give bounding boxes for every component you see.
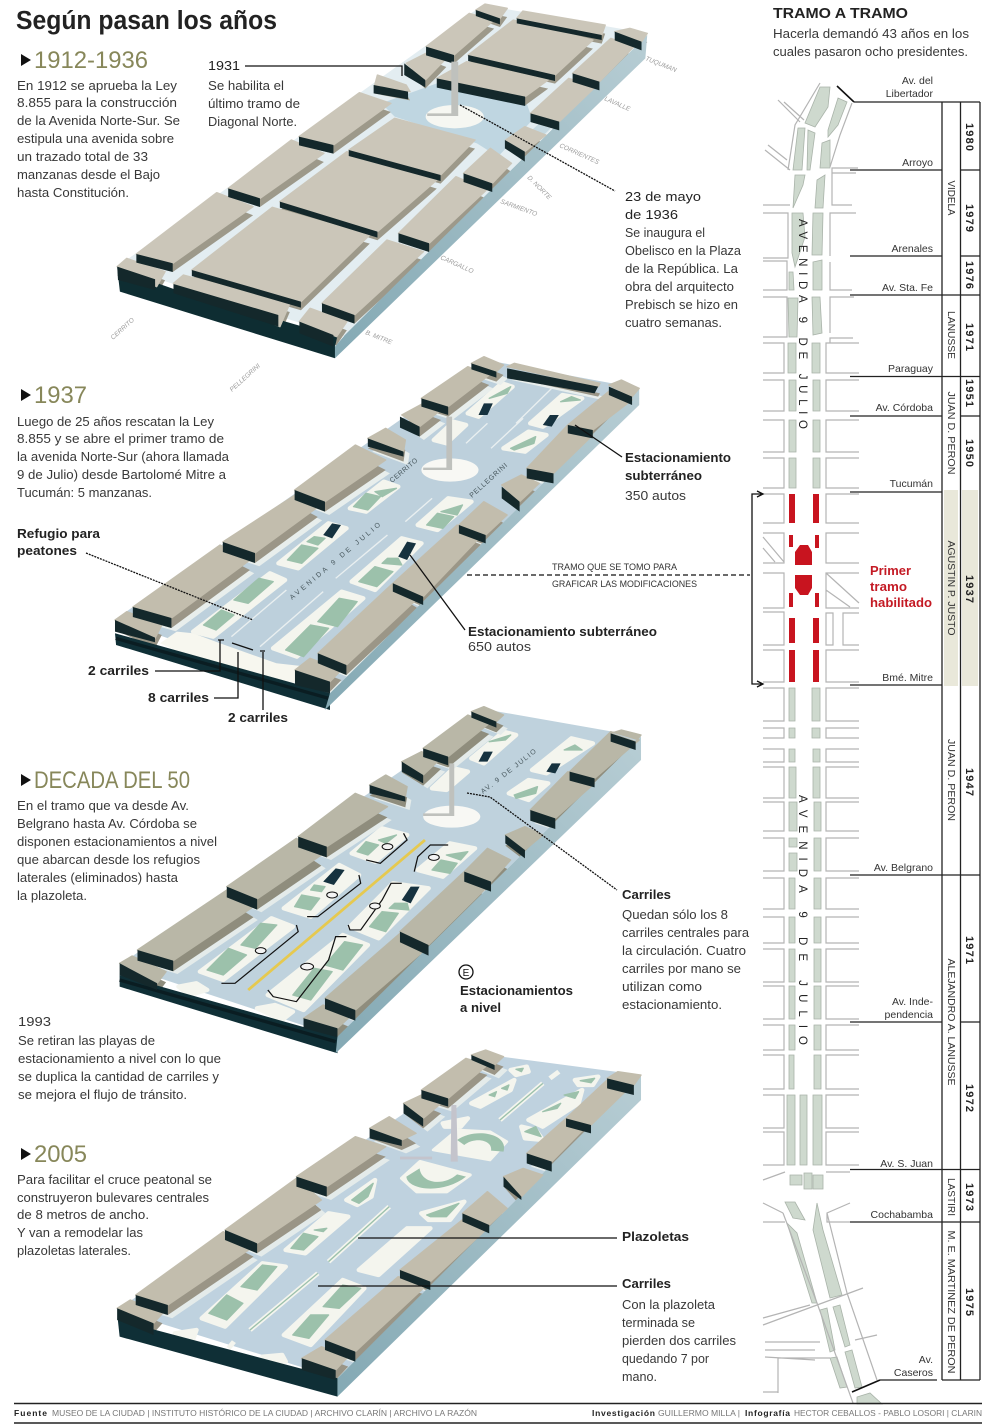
lane dividers [231, 388, 552, 647]
callout: 1931: Diagonal Norte. [208, 114, 297, 129]
callout: plazoletas: Plazoletas [622, 1229, 689, 1244]
heading: tramo a tramo: cuales pasaron ocho presidentes. [773, 44, 968, 59]
years: 1976 [963, 261, 975, 289]
text: 1993: se mejora el flujo de tránsito. [18, 1087, 187, 1102]
street names: Av. Inde- [892, 996, 933, 1008]
text: 1912-1936: hasta Constitución. [17, 185, 129, 200]
legend: estacionamientos a nivel: Estacionamientos [460, 983, 573, 998]
highlighted 1937 cells [944, 490, 978, 686]
street labels on second model [289, 457, 509, 602]
parking markers [255, 844, 439, 970]
street names: Av. Córdoba [876, 402, 933, 414]
presidents: LANUSSE [945, 311, 956, 359]
presidents: VIDELA [945, 180, 956, 216]
street surface [114, 360, 639, 693]
connector: section used for the models: GRAFICAR LAS MODIFICACIONES [552, 579, 697, 590]
right side blue strip [517, 33, 647, 150]
callout: carriles 2005: quedando 7 por [622, 1351, 710, 1366]
callout: 23 de mayo de 1936: 23 de mayo [625, 189, 701, 204]
street surface [120, 710, 641, 1037]
panel: 1937 block model [114, 357, 644, 710]
callout: carriles labels: 2 carriles [228, 710, 288, 725]
callout: refugio para peatones: peatones [17, 543, 77, 558]
street labels on first model: PELLEGRINI [229, 363, 262, 393]
base layer line [116, 638, 329, 698]
callout: 1931: último tramo de [208, 96, 300, 111]
text: 2005: Y van a remodelar las [17, 1225, 143, 1240]
street names: Caseros [894, 1367, 933, 1379]
callout: carriles 2005: terminada se [622, 1315, 695, 1330]
monument circle [426, 105, 484, 128]
bracket marking the modelled section [752, 491, 763, 687]
text: 1912-1936: 8.855 para la construcción [17, 95, 177, 110]
street labels on first model: LAVALLE [603, 95, 632, 113]
heading: tramo a tramo: Hacerla demandó 43 años en los [773, 26, 970, 41]
monument circle [423, 806, 480, 828]
callout: carriles 1950s [467, 793, 750, 1012]
street names: Arenales [892, 243, 933, 255]
parking islands [200, 732, 593, 1010]
street names: Av. S. Juan [880, 1158, 933, 1170]
street names: Av. Sta. Fe [882, 282, 933, 294]
connector: section used for the models: TRAMO QUE SE TOMO PARA [552, 562, 678, 573]
footer credits [14, 1404, 982, 1423]
street labels on first model: TUQUMAN [644, 55, 678, 74]
text: 2005: de 8 metros de ancho. [17, 1207, 149, 1222]
presidents: ALEJANDRO A. LANUSSE [945, 958, 956, 1086]
callout: estacionamiento 650 autos [410, 555, 657, 654]
section 2005 heading: 2005 [34, 1141, 87, 1168]
presidents: JUAN D. PERON [945, 739, 956, 821]
street names: Libertador [886, 88, 934, 100]
text: decade of the 50s [17, 798, 217, 903]
label: primer tramo habilitado: Primer [870, 563, 911, 578]
map of avenida 9 de julio [752, 83, 882, 1404]
obelisk [423, 417, 452, 470]
panel: 1912-1936 block model [117, 4, 647, 358]
lower plazoleta [402, 1162, 470, 1192]
text: 1912-1936: En 1912 se aprueba la Ley [17, 78, 178, 93]
text: 1937 [17, 414, 230, 500]
garden patches [204, 387, 580, 657]
street surface [117, 5, 647, 337]
callout: refugio para peatones [17, 526, 253, 620]
callout: 23 de mayo de 1936: cuatro semanas. [625, 315, 722, 330]
text: decade of the 50s: Belgrano hasta Av. Córdoba se [17, 816, 197, 831]
callout: 23 de mayo de 1936: Obelisco en la Plaza [625, 243, 742, 258]
callout: 23 de mayo de 1936: de la República. La [625, 261, 739, 276]
panel: 2005 block model [117, 1050, 645, 1397]
street names: Paraguay [888, 363, 934, 375]
text: 1912-1936: estipula una avenida sobre [17, 131, 174, 146]
callout: carriles 2005: pierden dos carriles [622, 1333, 736, 1348]
years: 1975 [963, 1288, 975, 1316]
callout: estacionamiento 350 autos [575, 425, 731, 503]
text: 1993: se duplica la cantidad de carriles y [18, 1069, 219, 1084]
lower section gardens [785, 1173, 882, 1404]
base right side [325, 388, 639, 710]
text: 1912-1936: un trazado total de 33 [17, 149, 148, 164]
presidents: JUAN D. PERON [945, 392, 956, 474]
callout: estacionamiento 350 autos: 350 autos [625, 488, 687, 503]
upper plazoleta [433, 1130, 507, 1160]
building end faces [117, 10, 642, 347]
building sidewalks [162, 376, 602, 693]
table lines [850, 102, 980, 1380]
heading: tramo a tramo: TRAMO A TRAMO [773, 5, 908, 22]
building side faces [117, 1060, 641, 1380]
footer credits: Investigación [592, 1408, 655, 1418]
street labels on first model: SARMIENTO [499, 198, 538, 218]
text: decade of the 50s: laterales (eliminados) hasta [17, 870, 179, 885]
panel: decade of the 50s block model [120, 707, 645, 1053]
text: 1937: Luego de 25 años rescatan la Ley [17, 414, 214, 429]
white front plaza area [160, 632, 307, 683]
straight section gardens [787, 343, 822, 1165]
legend: estacionamientos a nivel: a nivel [460, 1000, 501, 1015]
text: 1993: Se retiran las playas de [18, 1033, 155, 1048]
years: 1971 [963, 936, 975, 964]
avenue name, lower: AVENIDA 9 DE JULIO [796, 795, 808, 1045]
footer credits: MUSEO DE LA CIUDAD | INSTITUTO HISTÓRICO DE LA CIUDAD | ARCHIVO CLARÍN | ARCHIVO LA RAZÓN [52, 1409, 477, 1418]
street labels on first model: B. MITRE [364, 329, 394, 347]
callout: carriles 1950s: la circulación. Cuatro [622, 943, 746, 958]
garden patches [207, 735, 582, 1000]
footer credits: HECTOR CEBALLOS - PABLO LOSORI | CLARIN [794, 1409, 982, 1418]
callout: estacionamiento 350 autos: Estacionamiento [625, 450, 731, 465]
text: 1937: la avenida Norte-Sur (ahora llamada [17, 449, 230, 464]
callout: carriles 1950s: Carriles [622, 887, 671, 902]
label: primer tramo habilitado [870, 563, 932, 610]
obelisk [423, 763, 454, 816]
building roofs [117, 4, 647, 337]
callout: estacionamiento 650 autos: Estacionamiento subterráneo [468, 624, 657, 639]
text: 2005 [17, 1172, 212, 1258]
obelisk [400, 1105, 458, 1162]
street labels on first model [110, 55, 678, 393]
callout: 23 de mayo de 1936 [460, 105, 742, 330]
callout: 23 de mayo de 1936: Prebisch se hizo en [625, 297, 738, 312]
text: decade of the 50s: la plazoleta. [17, 888, 87, 903]
callout: carriles 1950s: utilizan como [622, 979, 702, 994]
callout: carriles labels [88, 640, 288, 725]
building side faces [120, 717, 641, 1039]
street cut marks [837, 86, 880, 1392]
label: primer tramo habilitado: habilitado [870, 595, 932, 610]
callout: 23 de mayo de 1936: obra del arquitecto [625, 279, 734, 294]
street names: Arroyo [902, 157, 933, 169]
callout: carriles 2005: Con la plazoleta [622, 1297, 716, 1312]
street labels on first model: CORRIENTES [558, 142, 601, 166]
years: 1950 [963, 439, 975, 467]
years [963, 123, 975, 1316]
building sidewalks [162, 1068, 546, 1378]
callout: carriles 1950s: carriles centrales para [622, 925, 750, 940]
parking brackets [221, 833, 448, 1002]
years: 1937 [963, 575, 975, 603]
years: 1973 [963, 1183, 975, 1211]
callout: carriles 2005: mano. [622, 1369, 657, 1384]
upper road outlines [763, 83, 858, 343]
text: 1993 [18, 1014, 221, 1102]
upper plazoleta garden arc [457, 1133, 504, 1152]
base front side [115, 633, 330, 710]
parking islands [193, 383, 582, 657]
text: 1912-1936: manzanas desde el Bajo [17, 167, 160, 182]
white plazas and islands [175, 1067, 598, 1363]
street labels on first model: CARGALLO [439, 254, 474, 275]
street names: Bmé. Mitre [882, 672, 933, 684]
lower plazoleta garden arc [406, 1168, 466, 1189]
text: 1912-1936 [17, 78, 180, 200]
text: 1937: 8.855 y se abre el primer tramo de [17, 431, 224, 446]
lower road outlines [763, 1172, 877, 1403]
street names: Cochabamba [871, 1209, 933, 1221]
callout: carriles labels: 2 carriles [88, 663, 149, 678]
building roofs [120, 707, 641, 1028]
text: 1993: estacionamiento a nivel con lo que [18, 1051, 221, 1066]
legend: estacionamientos a nivel [459, 965, 573, 1015]
footer credits: Fuente [14, 1408, 47, 1418]
callout: carriles 1950s: estacionamiento. [622, 997, 722, 1012]
callout: 1931: 1931 [208, 58, 240, 73]
street labels on second model: CERRITO [389, 457, 420, 485]
street surface [117, 1055, 641, 1378]
presidents [945, 180, 956, 1374]
base front side [120, 975, 337, 1053]
monument circle [421, 458, 479, 482]
text: 1937: 9 de Julio) desde Bartolomé Mitre a [17, 467, 227, 482]
obelisk [427, 62, 458, 116]
street names: pendencia [885, 1009, 933, 1021]
presidents: AGUSTIN P. JUSTO [945, 540, 956, 636]
street labels on first model: CERRITO [110, 317, 136, 341]
legend: estacionamientos a nivel: E [463, 968, 470, 979]
building side faces [117, 13, 647, 345]
street names [871, 75, 934, 1379]
text: 1993: 1993 [18, 1014, 51, 1029]
section decade heading: DECADA DEL 50 [34, 767, 190, 794]
callout: carriles labels: 8 carriles [148, 690, 209, 705]
years: 1947 [963, 768, 975, 796]
years: 1979 [963, 204, 975, 232]
central yellow line [248, 840, 425, 990]
years: 1972 [963, 1084, 975, 1112]
text: decade of the 50s: que abarcan desde los refugios [17, 852, 201, 867]
years: 1980 [963, 123, 975, 151]
section 1937 heading: 1937 [34, 382, 87, 409]
text: 1937: Tucumán: 5 manzanas. [17, 485, 152, 500]
base right side [336, 737, 641, 1053]
plaza with monument circle [381, 83, 532, 157]
callout: carriles 2005: Carriles [622, 1276, 671, 1291]
timeline table [850, 75, 980, 1380]
building side faces [115, 367, 639, 692]
street label on third model: AV. 9 DE JULIO [480, 748, 538, 796]
building sidewalks [156, 726, 549, 1021]
connector: section used for the models [467, 562, 750, 590]
years: 1951 [963, 379, 975, 407]
heading: tramo a tramo [773, 5, 970, 59]
street names: Av. [919, 1354, 933, 1366]
street labels on second model: PELLEGRINI [469, 462, 509, 499]
label: primer tramo habilitado: tramo [870, 579, 907, 594]
text: 2005: plazoletas laterales. [17, 1243, 131, 1258]
text: decade of the 50s: En el tramo que va desde Av. [17, 798, 189, 813]
title: Según pasan los años [16, 7, 277, 35]
callout: carriles 1950s: Quedan sólo los 8 [622, 907, 728, 922]
building end faces [115, 363, 632, 693]
text: 1912-1936: de la Avenida Norte-Sur. Se [17, 113, 180, 128]
first section in red [789, 494, 819, 682]
base front side [118, 1320, 337, 1397]
white spots at the front [179, 983, 293, 1020]
base right side [335, 35, 647, 358]
footer credits: GUILLERMO MILLA | [658, 1409, 740, 1418]
years: 1971 [963, 323, 975, 351]
street labels on second model: AVENIDA 9 DE JULIO [289, 521, 383, 602]
base front side [117, 267, 337, 358]
building end faces [120, 712, 636, 1037]
underground parking slots [323, 752, 561, 903]
text: 2005: Para facilitar el cruce peatonal se [17, 1172, 212, 1187]
garden patches [209, 1068, 595, 1338]
building roofs [115, 357, 639, 682]
presidents: M. E. MARTINEZ DE PERON [945, 1230, 956, 1374]
presidents: LASTIRI [945, 1178, 956, 1216]
callout: 23 de mayo de 1936: Se inaugura el [625, 225, 705, 240]
callout: 1931 [208, 58, 402, 129]
street names: Tucumán [890, 478, 933, 490]
callout: refugio para peatones: Refugio para [17, 526, 101, 541]
callout: 1931: Se habilita el [208, 78, 284, 93]
street names: Av. del [902, 75, 933, 87]
underground parking slots [323, 403, 559, 560]
callout: estacionamiento 350 autos: subterráneo [625, 468, 702, 483]
base right side [337, 1075, 641, 1397]
building roofs [117, 1050, 641, 1370]
callout: estacionamiento 650 autos: 650 autos [468, 639, 532, 654]
avenue name, upper: AVENIDA 9 DE JULIO [796, 219, 808, 429]
section 1912-1936 heading: 1912-1936 [34, 47, 148, 74]
footer credits: Infografía [745, 1408, 790, 1418]
street names: Av. Belgrano [874, 862, 933, 874]
boulevard gardens [250, 1083, 543, 1330]
text: decade of the 50s: disponen estacionamientos a nivel [17, 834, 217, 849]
callout: carriles 1950s: carriles por mano se [622, 961, 741, 976]
straight section blocks [763, 343, 859, 1165]
callout: 23 de mayo de 1936: de 1936 [625, 207, 678, 222]
text: 2005: construyeron bulevares centrales [17, 1190, 209, 1205]
base layer line [120, 980, 336, 1042]
street labels on first model: D. NORTE [526, 174, 553, 202]
upper curved section gardens [788, 87, 847, 337]
building end faces [117, 1055, 634, 1380]
boulevards [229, 1072, 559, 1348]
callout: carriles 2005 [318, 1276, 736, 1384]
